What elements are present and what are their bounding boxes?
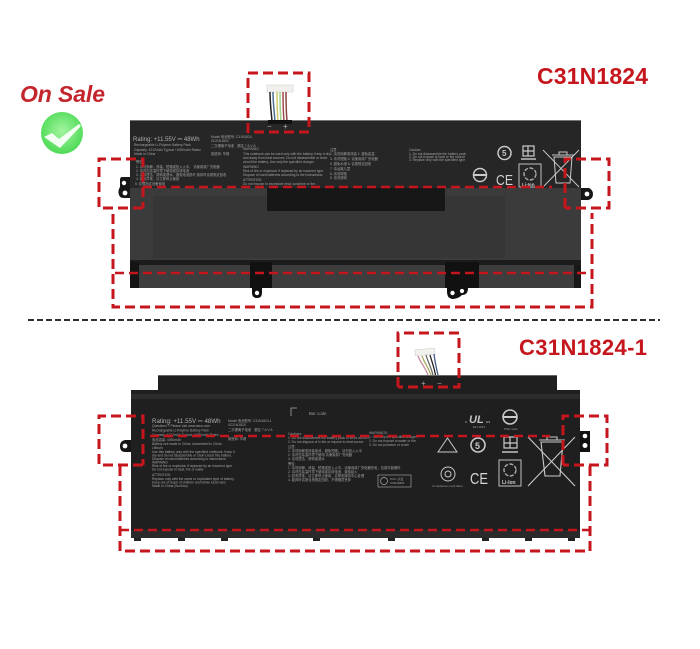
label text: notes: 1. 请勿拆解或改装 2. 避免高温 <box>330 151 375 156</box>
battery body <box>130 120 581 288</box>
icon: warning triangle <box>438 438 457 452</box>
icon: class 5 circle: 5 <box>502 149 507 158</box>
label text: rating: Questions ? Please visit www.asus.com <box>152 424 210 428</box>
label text: rating: 3. 请勿撞击、穿刺或浸水，避免电池损坏 废弃时请按规定回收 <box>136 172 227 177</box>
label text: rating: 电池容量: 4050mAh <box>152 437 181 442</box>
label text: cautions: 2. Do not dispose of in fire or expose to heat source <box>288 440 364 444</box>
label text: model: 制造商: 华硕 <box>228 436 247 441</box>
label text: cautions: 3. 如有异常，请立即停止使用，并联系服务中心处理 <box>288 473 365 478</box>
connector: bottom battery <box>415 348 442 388</box>
icon: UL mark <box>465 414 490 429</box>
label text: caution: 3. Replace only with the specified type <box>409 158 465 162</box>
label text: cautions: 2. 请勿在高温环境下使用 请使用原厂充电器 <box>288 452 353 457</box>
label text: model: 制造商: 华硕 <box>211 151 230 156</box>
label text: model: Model 电池型号: C31N1824 <box>211 134 252 139</box>
label text: cautions: 警告: <box>288 461 296 466</box>
label text: cautions <box>288 432 401 482</box>
icon: e-mark <box>474 168 486 182</box>
icon: target compliance: Compliance mark label <box>432 484 463 488</box>
label text: caution: 2. Do not expose to heat or fire source <box>409 155 465 159</box>
label text: warning: WARNING <box>243 165 259 169</box>
icon: recycling Li-Ion: Li-Ion <box>502 480 516 486</box>
connector: top battery: + <box>283 122 288 131</box>
battery: C31N1824 <box>118 120 593 299</box>
label text: notes: 7. 请远离儿童 <box>330 166 351 171</box>
battery body <box>131 375 580 538</box>
icon: crossed-out bin <box>528 437 575 486</box>
title: C31N1824: C31N1824 <box>537 63 648 89</box>
label text: rating: Do not expose to heat, fire or water. <box>152 468 204 472</box>
icon: green check badge <box>41 112 83 154</box>
label text: cautions: 3. 请勿撞击、穿刺或浸水 <box>288 456 325 461</box>
label text: warnings right: WARNINGS: <box>369 431 388 435</box>
label text: rating: Keep out of reach of children and follow local rules <box>152 480 226 484</box>
mounting tabs <box>118 177 593 299</box>
label text: rating: Made in China <box>134 152 155 156</box>
label text: rating: dry and do not disassemble or short circuit this battery. <box>152 454 232 458</box>
label text: rating: Rechargeable Li-Polymer Battery Pack <box>152 428 209 432</box>
certificate box <box>378 475 411 487</box>
connector: top battery <box>267 85 293 131</box>
label text: model: 二次锂离子电池 额定 7.6 V A <box>228 427 273 432</box>
icon: recycling Li-Ion: Li-Ion <box>522 182 535 187</box>
icon: e-mark: PSE mark <box>504 427 518 431</box>
icon: target compliance <box>432 467 463 488</box>
icon: CE mark: CE <box>496 172 513 189</box>
black recess <box>267 188 445 211</box>
red dashed callouts: bottom battery <box>99 333 607 551</box>
label text: rating: Capacity: 4212mAh Typical / 4050mAh Rated <box>134 148 201 152</box>
label text: cautions: Cautions: <box>288 432 302 436</box>
label text: rating <box>133 137 227 186</box>
label text: cautions: 1. 请勿拆解、改装、短路或投入火中，请使用原厂充电器充电，否则可能爆炸 <box>288 465 401 470</box>
label text: model: 二次锂离子电池 额定 7.6 V A <box>211 143 256 148</box>
label text: caution: Caution: <box>409 148 421 152</box>
label: bar code: Bar code <box>309 411 327 416</box>
label text: notes <box>330 147 379 180</box>
label text: warnings right: 3. Do not puncture or crush <box>369 443 409 447</box>
label text: rating: Battery cell made in China. Assembled in China <box>152 442 222 446</box>
mounting tabs <box>120 431 590 452</box>
label: On Sale: On Sale <box>20 81 105 107</box>
label text: notes: 5. 避免水浸 6. 请按规定回收 <box>330 161 372 166</box>
icon: recycling mark square <box>502 437 518 453</box>
label text: notes: 3. 请勿短路 4. 请使用原厂充电器 <box>330 156 379 161</box>
label text: warning: Dispose of used batteries according to the instructions. <box>243 173 323 177</box>
icon: UL mark: UL <box>469 414 484 426</box>
label text: rating: Dispose of used batteries according to instructions. <box>152 457 227 461</box>
label text: notes: 8. 请勿掉落 <box>330 171 348 176</box>
label text: warnings right: 1. Use only the specified charger <box>369 435 418 439</box>
label text: model: Model 电池型号: C31N1824-1 <box>228 418 272 423</box>
icon: recycling mark square <box>521 146 536 160</box>
label text: model: 0C21N1824 <box>228 423 246 427</box>
icon: class 5 circle: 5 <box>475 441 480 451</box>
certificate box: CCC 认证 <box>390 476 403 481</box>
label text: model: 0C21N1824 <box>211 139 229 143</box>
title: C31N1824-1: C31N1824-1 <box>519 335 647 360</box>
icon: UL mark: c <box>465 419 467 424</box>
label text: rating: Rating: +11.55V ⎓ 48Wh <box>152 418 221 425</box>
label text: model <box>228 418 273 441</box>
label text: warning: circuit the battery. Use only the specified charger. <box>243 160 315 164</box>
label text: warning: This notebook can be used only with the battery. Keep it dry <box>243 152 331 156</box>
connector: bottom battery: + <box>421 379 426 388</box>
label text: rating: 2. 请勿在高温环境下使用或存放电池 <box>136 168 190 173</box>
connector: bottom battery: − <box>437 379 442 388</box>
feet <box>134 538 575 541</box>
label text: notes: 注意 <box>330 147 337 152</box>
label text: rating: Use this battery only with the specified notebook. Keep it <box>152 450 235 454</box>
icon: crossed-out bin <box>543 150 579 187</box>
icon: UL mark: E171694 <box>473 425 485 429</box>
label text: rating: WARNING <box>152 460 168 464</box>
label text: warnings right: 2. Do not expose to water or fire <box>369 439 416 443</box>
icon: class 5 circle <box>498 146 511 160</box>
label text: caution: 1. Do not disassemble the battery pack <box>409 152 466 156</box>
label text: warning: ATTENTION <box>243 178 262 182</box>
label text: rating: Capacity: 4212mAh Typical / 4050mAh Rated <box>152 433 219 437</box>
label text: cautions: 2. 请勿在高温环境下使用或存放电池，避免起火 <box>288 469 358 474</box>
red dashed callouts: top battery <box>99 73 609 307</box>
label text: warning: Risk of fire or explosion if replaced by an incorrect type. <box>243 169 324 173</box>
label text: warning: WARNING <box>243 147 259 151</box>
label text: rating <box>152 418 235 488</box>
label text: caution <box>409 148 466 162</box>
label text: cautions: 1. Do not disassemble the battery pack or short circuit it <box>288 436 369 440</box>
label text: rating: Rechargeable Li-Polymer Battery Pack <box>134 143 191 147</box>
icon: UL mark: us <box>486 419 490 424</box>
label text: cautions: 4. 废弃时请按当地规定回收，不得随意丢弃 <box>288 477 352 482</box>
label text: model <box>211 134 256 156</box>
label text: warnings right <box>369 431 418 447</box>
label text: rating: 1. 请勿拆解、改装、短路或投入火中。 请使用原厂充电器 <box>136 164 220 169</box>
label: bar code <box>291 408 327 416</box>
label text: warning: Do not expose to excessive heat, sunshine or fire. <box>243 182 316 186</box>
connector: top battery: − <box>267 122 272 131</box>
icon: recycling Li-Ion <box>519 164 541 187</box>
icon: class 5 circle <box>471 438 485 452</box>
icon: CE mark: CE <box>470 471 488 488</box>
label text: rating: 4. 如有异常，请立即停止使用 <box>136 176 179 181</box>
icon: e-mark <box>503 410 518 431</box>
label text: cautions: 注意: <box>288 444 296 449</box>
label text: notes: 9. 请勿穿刺 <box>330 175 348 180</box>
label text: warning: and away from heat sources. Do not disassemble or short <box>243 156 327 160</box>
label text: rating: 5. 仅限指定设备使用 <box>135 181 165 186</box>
divider: dashed line <box>28 319 660 321</box>
label text: rating: Replace only with the same or equivalent type of battery. <box>152 477 235 481</box>
label text: rating: Lithium <box>152 446 163 450</box>
certificate box: C31N1824 <box>390 481 405 485</box>
icon: recycling Li-Ion <box>499 460 521 486</box>
battery: C31N1824-1 <box>120 375 590 541</box>
label text: cautions: 1. 请勿拆解或改装电池，避免短路。 请勿投入火中 <box>288 448 362 453</box>
label text: rating: Risk of fire or explosion if replaced by an incorrect type. <box>152 464 233 468</box>
label text: warning <box>243 147 331 186</box>
label text: rating: 警告 <box>136 159 143 164</box>
label text: rating: ATTENTION <box>152 473 171 477</box>
label text: rating: Rating: +11.55V ⎓ 48Wh <box>133 137 200 143</box>
label text: rating: Made in China (Suzhou) <box>152 484 188 488</box>
